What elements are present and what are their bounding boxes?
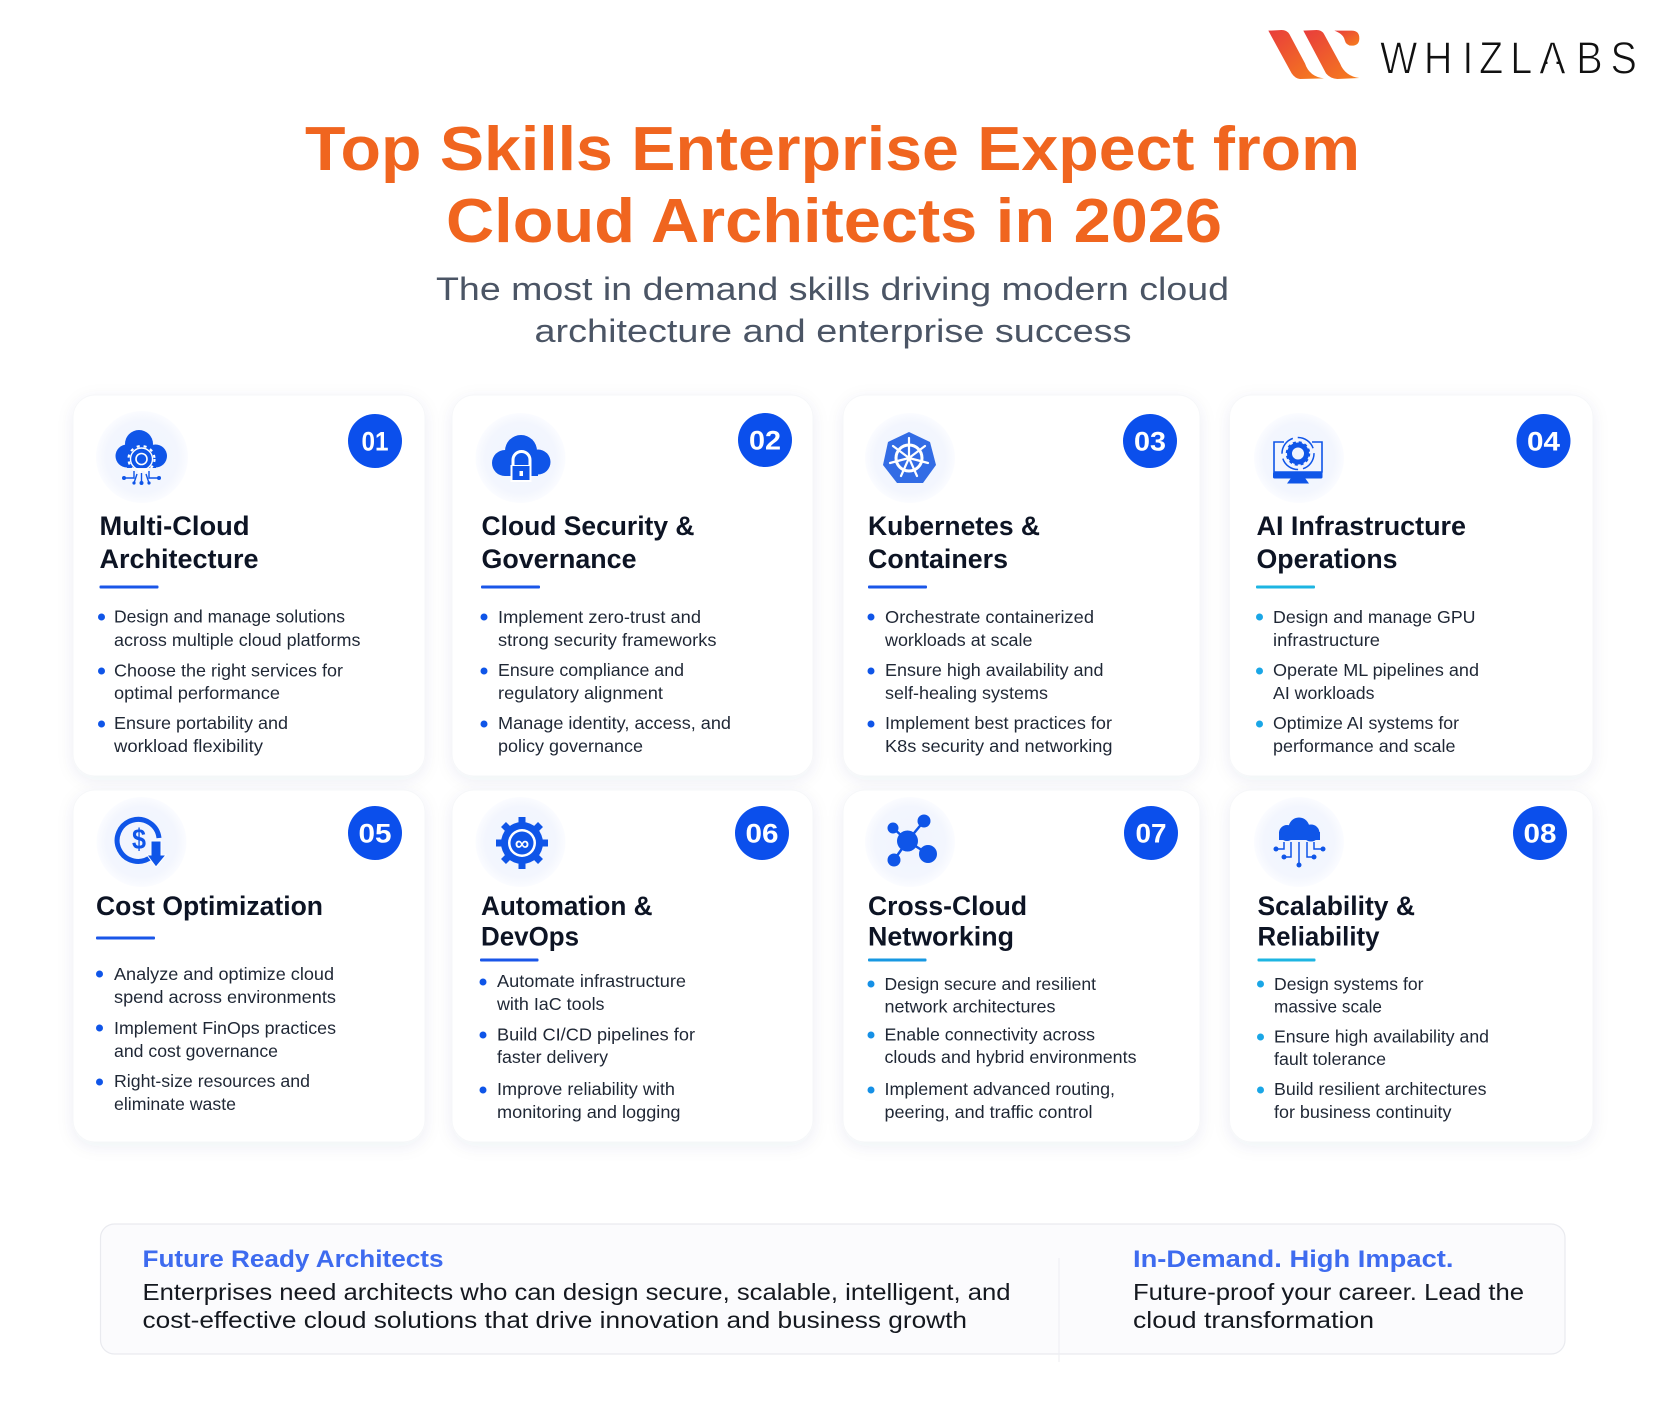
heading: Automation & <box>481 891 652 921</box>
bullet list: Analyze and optimize cloud <box>114 964 334 984</box>
bullet list: Build resilient architectures <box>1274 1079 1487 1099</box>
heading: Governance <box>482 544 636 574</box>
bullet list: strong security frameworks <box>498 630 717 650</box>
logo: Whizlabs <box>1268 30 1637 83</box>
bullet list: Design and manage GPU <box>1273 607 1476 627</box>
bullet list: Implement FinOps practices <box>114 1018 336 1038</box>
heading: Cross-Cloud <box>868 891 1027 921</box>
bullet list: Right-size resources and <box>114 1071 310 1091</box>
bullet list: policy governance <box>498 736 643 756</box>
number badge 03 <box>1123 414 1177 468</box>
icon: dollar with down arrow <box>96 797 186 887</box>
panel: 08 Scalability & Reliability <box>1230 790 1593 1142</box>
heading: Kubernetes & <box>868 511 1040 541</box>
logo wordmark: WHIZLABS <box>1380 33 1637 83</box>
bullet list: massive scale <box>1274 996 1382 1016</box>
panel: 05 Cost Optimization <box>73 790 425 1142</box>
bullet list: peering, and traffic control <box>884 1102 1092 1122</box>
panel: 03 Kubernetes & Containers <box>843 395 1200 776</box>
number badge 02 <box>738 413 792 467</box>
accent underline <box>480 958 538 962</box>
text block: Future Ready Architects: Future Ready Architects <box>142 1246 444 1273</box>
accent underline <box>481 586 540 588</box>
number badge 01 <box>348 414 402 468</box>
number badge 08 <box>1513 806 1567 860</box>
accent underline <box>868 586 927 588</box>
icon: gear with infinity loop: ∞ <box>515 833 529 855</box>
icon: gear with infinity loop <box>476 797 566 887</box>
text block: In-Demand. High Impact. <box>1133 1246 1524 1333</box>
number badge 03: 03 <box>1134 426 1166 456</box>
number badge 08: 08 <box>1524 818 1556 848</box>
icon: monitor with rotating gear <box>1254 413 1344 503</box>
bullet list: monitoring and logging <box>497 1102 680 1122</box>
bullet list: Ensure portability and <box>114 713 288 733</box>
heading: Scalability & <box>1258 891 1415 921</box>
accent underline <box>100 586 158 588</box>
heading <box>1258 891 1415 952</box>
bullet list: across multiple cloud platforms <box>114 630 361 650</box>
bullet list: with IaC tools <box>496 994 605 1014</box>
bullet list: regulatory alignment <box>498 683 663 703</box>
bullet list: Ensure high availability and <box>885 660 1104 680</box>
number badge 06: 06 <box>746 818 778 848</box>
bullet list <box>1257 974 1489 1122</box>
bullet list: Build CI/CD pipelines for <box>497 1024 695 1044</box>
heading <box>868 511 1040 574</box>
icon: cloud with padlock <box>476 413 566 503</box>
bullet list: Operate ML pipelines and <box>1273 660 1479 680</box>
number badge 01: 01 <box>362 426 388 456</box>
text block: Future Ready Architects: Enterprises need architects who can design secure, scalable, intelligent, and <box>142 1279 1010 1305</box>
heading <box>1256 511 1466 574</box>
title: Cloud Architects in 2026 <box>446 187 1222 256</box>
heading: AI Infrastructure <box>1256 511 1466 541</box>
heading: Cost Optimization <box>96 891 323 921</box>
text block: In-Demand. High Impact.: In-Demand. High Impact. <box>1133 1246 1454 1273</box>
bullet list: Ensure compliance and <box>498 660 684 680</box>
icon: cloud with circuit lines <box>1254 797 1344 887</box>
heading: Cloud Security & <box>482 511 694 541</box>
bullet list: Improve reliability with <box>497 1079 675 1099</box>
panel: footer callout <box>100 1224 1565 1362</box>
icon: dollar with down arrow: $ <box>132 824 146 856</box>
bullet list: Implement best practices for <box>885 713 1112 733</box>
panel: 06 Automation & DevOps <box>452 790 813 1142</box>
bullet list <box>98 606 361 756</box>
bullet list: Design and manage solutions <box>114 606 345 626</box>
bullet list: network architectures <box>884 996 1056 1016</box>
bullet list: Ensure high availability and <box>1274 1026 1489 1046</box>
bullet list: fault tolerance <box>1274 1049 1386 1069</box>
heading: Operations <box>1256 544 1398 574</box>
bullet list: eliminate waste <box>114 1094 236 1114</box>
number badge 07 <box>1124 806 1178 860</box>
text block: In-Demand. High Impact.: Future-proof your career. Lead the <box>1133 1279 1524 1305</box>
heading: Architecture <box>100 544 258 574</box>
bullet list <box>96 964 336 1114</box>
bullet list: AI workloads <box>1273 683 1375 703</box>
bullet list: K8s security and networking <box>885 736 1112 756</box>
heading: Networking <box>868 922 1014 952</box>
accent underline <box>1256 586 1315 588</box>
title: Top Skills Enterprise Expect from <box>305 115 1360 184</box>
bullet list <box>868 607 1112 756</box>
bullet list: faster delivery <box>497 1047 608 1067</box>
panel: 07 Cross-Cloud Networking <box>843 790 1200 1142</box>
heading: Reliability <box>1258 922 1380 952</box>
bullet list: workloads at scale <box>884 630 1032 650</box>
bullet list: Automate infrastructure <box>497 971 686 991</box>
bullet list: Design secure and resilient <box>884 974 1096 994</box>
heading: Containers <box>868 544 1008 574</box>
number badge 05 <box>348 806 402 860</box>
bullet list: Optimize AI systems for <box>1273 713 1459 733</box>
bullet list: infrastructure <box>1273 630 1380 650</box>
text block: Future Ready Architects <box>142 1246 1010 1333</box>
title <box>305 115 1360 256</box>
bullet list: optimal performance <box>114 683 280 703</box>
bullet list: self-healing systems <box>885 683 1048 703</box>
bullet list: clouds and hybrid environments <box>884 1047 1137 1067</box>
icon: Whizlabs W mark <box>1268 30 1359 79</box>
bullet list: Implement advanced routing, <box>884 1079 1115 1099</box>
bullet list <box>868 974 1137 1122</box>
bullet list <box>480 607 731 756</box>
panel: 02 Cloud Security & Governance <box>452 395 813 776</box>
icon: cloud with gear and circuit <box>96 411 188 503</box>
heading: DevOps <box>481 922 579 952</box>
bullet list: Manage identity, access, and <box>498 713 731 733</box>
heading <box>868 891 1027 952</box>
bullet list: Implement zero-trust and <box>498 607 701 627</box>
heading <box>482 511 694 574</box>
accent underline <box>96 936 155 940</box>
panel: 04 AI Infrastructure Operations <box>1230 395 1593 776</box>
bullet list <box>480 971 695 1122</box>
bullet list: workload flexibility <box>113 736 263 756</box>
bullet list: spend across environments <box>114 987 336 1007</box>
number badge 04 <box>1516 414 1570 468</box>
text block: In-Demand. High Impact.: cloud transformation <box>1133 1307 1374 1333</box>
text block: Future Ready Architects: cost-effective cloud solutions that drive innovation and business growth <box>142 1307 967 1333</box>
heading <box>100 511 258 574</box>
bullet list: Enable connectivity across <box>884 1024 1095 1044</box>
heading <box>481 891 652 952</box>
subtitle: The most in demand skills driving modern cloud <box>436 271 1229 307</box>
number badge 02: 02 <box>749 426 781 456</box>
bullet list: Design systems for <box>1274 974 1424 994</box>
bullet list: Orchestrate containerized <box>885 607 1094 627</box>
subtitle <box>436 271 1229 349</box>
panel: 01 Multi-Cloud Architecture <box>73 395 425 776</box>
icon: Kubernetes helm wheel <box>865 413 955 503</box>
bullet list <box>1256 607 1479 756</box>
subtitle: architecture and enterprise success <box>534 313 1132 349</box>
number badge 05: 05 <box>358 818 392 848</box>
bullet list: Choose the right services for <box>114 660 343 680</box>
number badge 06 <box>735 806 789 860</box>
accent underline <box>1258 958 1316 962</box>
bullet list: for business continuity <box>1274 1102 1452 1122</box>
number badge 07: 07 <box>1136 818 1166 848</box>
icon: network nodes <box>865 797 955 887</box>
bullet list: performance and scale <box>1273 736 1456 756</box>
number badge 04: 04 <box>1527 426 1560 456</box>
heading: Multi-Cloud <box>100 511 250 541</box>
accent underline <box>868 958 926 962</box>
bullet list: and cost governance <box>114 1041 278 1061</box>
